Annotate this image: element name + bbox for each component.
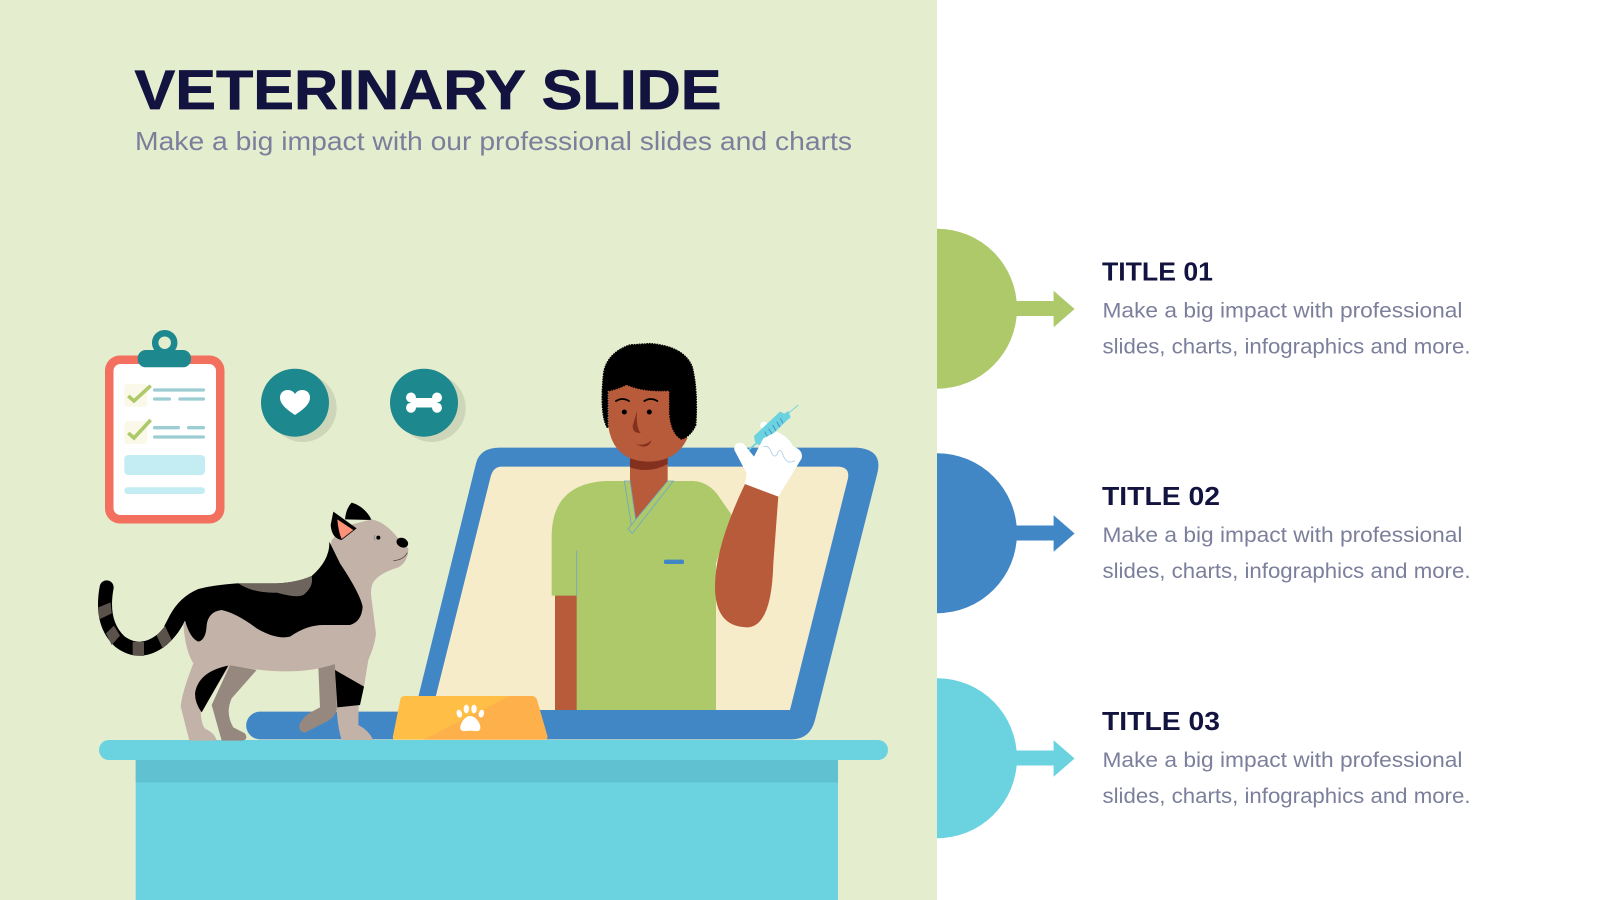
body 03: Make a big impact with professional bbox=[1102, 749, 1462, 772]
body 01 bbox=[1102, 299, 1470, 358]
laptop screen bbox=[432, 467, 848, 710]
item 02 bbox=[937, 453, 1470, 613]
desk bbox=[99, 740, 888, 900]
semicircle with arrow bbox=[937, 453, 1075, 613]
cat front ear bbox=[331, 512, 357, 540]
cat leg patches bbox=[195, 666, 364, 712]
gloved hand bbox=[734, 432, 802, 497]
body 03: slides, charts, infographics and more. bbox=[1102, 785, 1470, 808]
semicircle with arrow bbox=[937, 229, 1075, 389]
icon: clipboard bbox=[105, 333, 224, 524]
icon: bone badge bbox=[390, 369, 466, 442]
cat far legs bbox=[212, 665, 257, 741]
body 02: Make a big impact with professional bbox=[1102, 524, 1462, 547]
syringe bbox=[743, 405, 798, 456]
heading 02: TITLE 02 bbox=[1102, 481, 1220, 511]
item 01 bbox=[937, 229, 1470, 389]
veterinarian bbox=[552, 344, 802, 710]
pet food bowl bbox=[393, 696, 547, 740]
cat body bbox=[181, 519, 408, 741]
cat back ear bbox=[345, 503, 372, 520]
body 03 bbox=[1102, 749, 1470, 808]
subtitle: Make a big impact with our professional slides and charts bbox=[135, 126, 852, 156]
item 03 bbox=[937, 678, 1470, 838]
title: VETERINARY SLIDE bbox=[134, 58, 722, 121]
icon: heart badge bbox=[261, 369, 337, 442]
panel: left background bbox=[0, 0, 937, 900]
cat face bbox=[374, 535, 410, 561]
heading 01: TITLE 01 bbox=[1102, 257, 1213, 287]
cat grey patch bbox=[238, 576, 312, 596]
body 02: slides, charts, infographics and more. bbox=[1102, 560, 1470, 583]
semicircle with arrow bbox=[937, 678, 1075, 838]
body 01: slides, charts, infographics and more. bbox=[1102, 335, 1470, 358]
cat tail bbox=[105, 587, 178, 649]
cat bbox=[98, 503, 410, 741]
body 02 bbox=[1102, 524, 1470, 583]
heading 03: TITLE 03 bbox=[1102, 706, 1220, 736]
laptop and veterinarian bbox=[246, 344, 878, 740]
body 01: Make a big impact with professional bbox=[1102, 299, 1462, 322]
cat black saddle bbox=[164, 542, 363, 642]
icon: paw bbox=[456, 705, 485, 731]
laptop frame bbox=[246, 448, 878, 739]
